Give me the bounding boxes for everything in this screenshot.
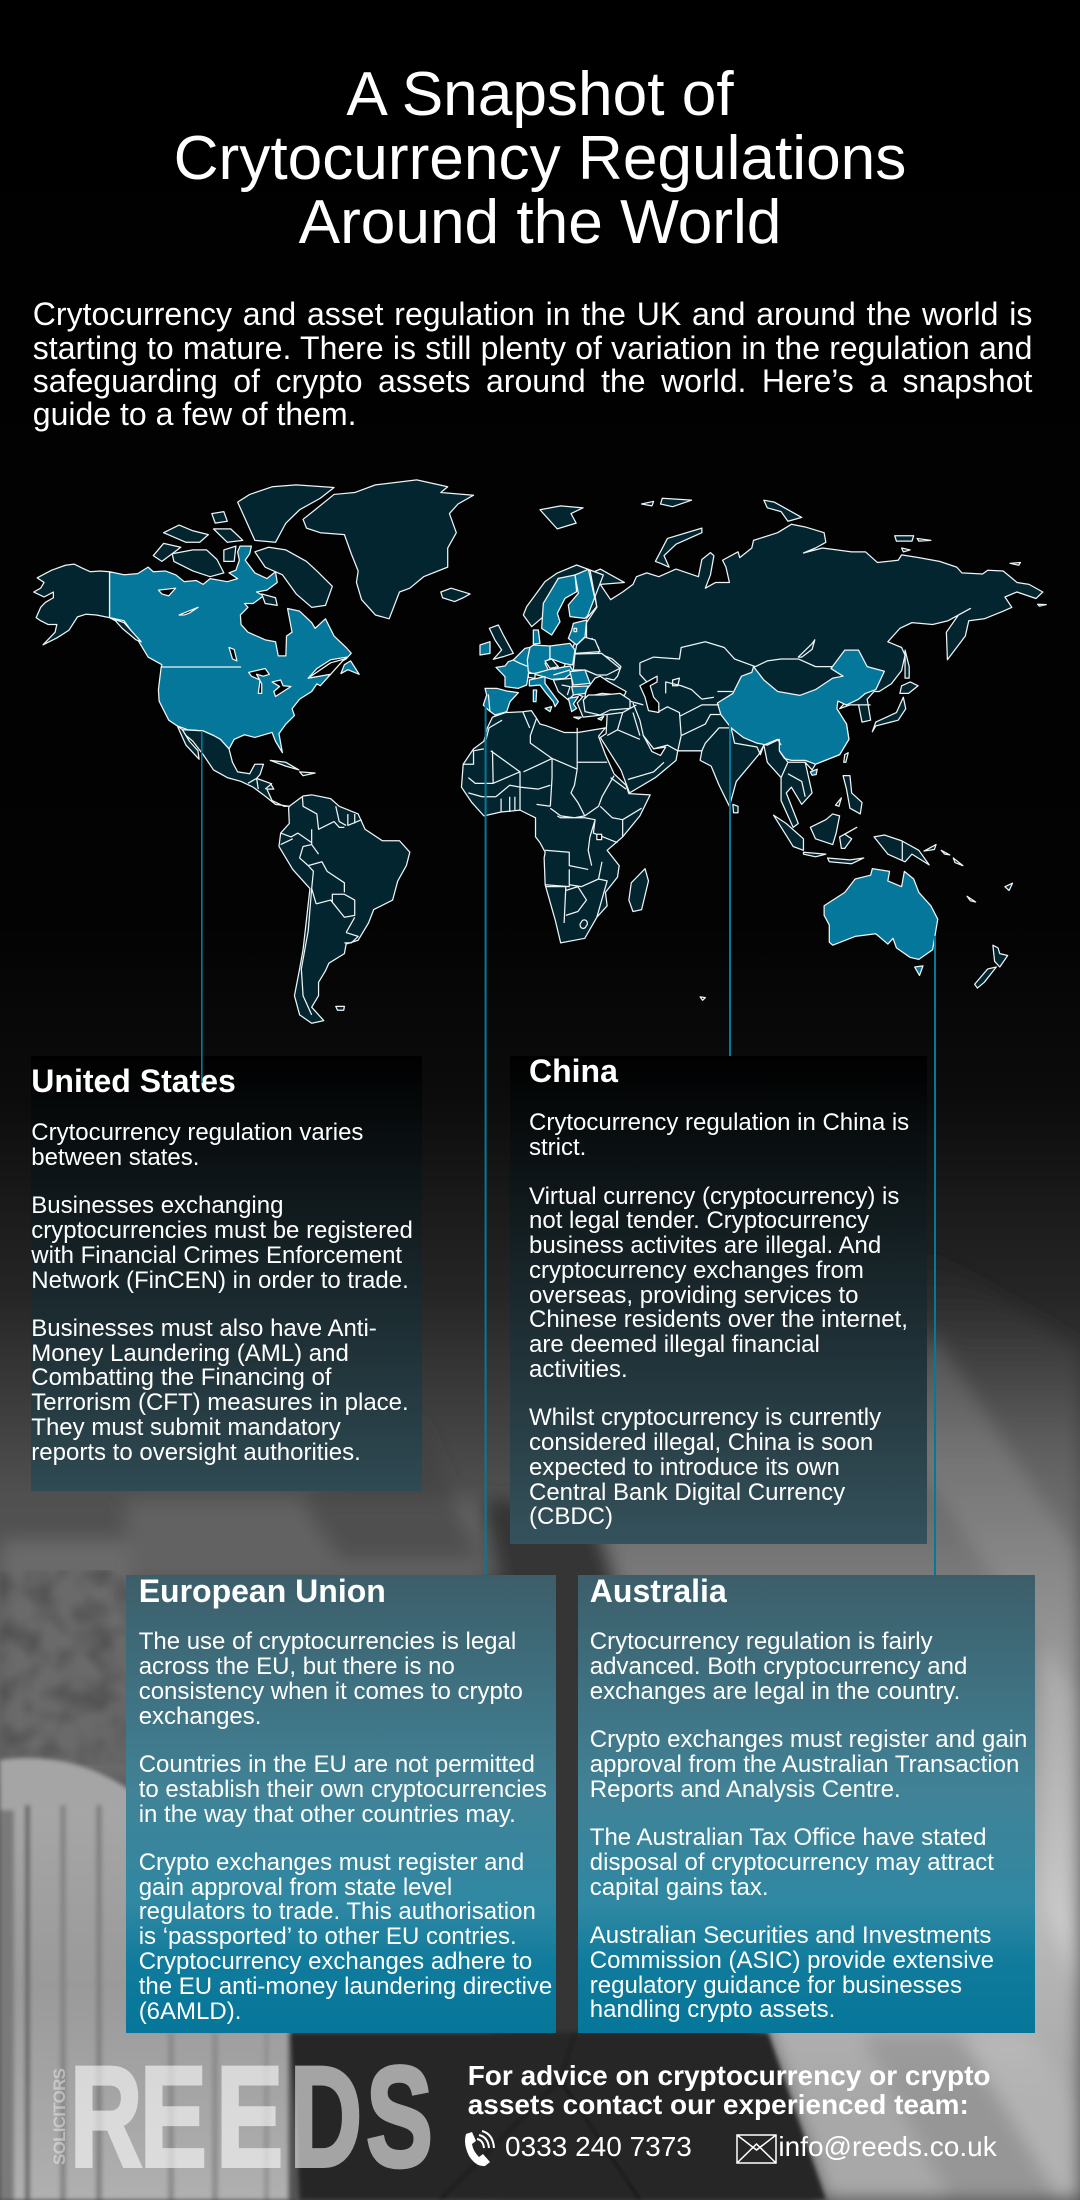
heading: United States: United States [31,1063,236,1099]
title [174,60,906,257]
text: United States details: reports to oversight authorities. [31,1439,361,1466]
text: United States details: Money Laundering (AML) and [31,1340,349,1367]
text: European Union details: gain approval from state level [139,1874,452,1901]
connector: European Union [485,704,487,1575]
text: Australia details: Crypto exchanges must register and gain [590,1726,1027,1753]
text: European Union details: to establish their own cryptocurrencies [139,1776,547,1803]
text: Australia details: capital gains tax. [590,1874,769,1901]
text: China details: business activites are illegal. And [529,1232,881,1259]
text: European Union details [139,1628,552,2024]
connector: Australia [934,936,936,1575]
panel: European Union [126,1575,556,2033]
intro text: safeguarding of crypto assets around the world. Here’s a snapshot [33,363,1032,399]
panel: China [510,1056,927,1544]
connector: United States [201,731,203,1083]
text: United States details: Businesses must also have Anti- [31,1315,377,1342]
text: Australia details: approval from the Australian Transaction [590,1751,1019,1778]
intro text: Crytocurrency and asset regulation in the UK and around the world is [33,296,1032,332]
email address: info@reeds.co.uk [778,2131,997,2162]
text: United States details: Businesses exchanging [31,1192,283,1219]
panel: United States [31,1056,422,1491]
text: European Union details: in the way that other countries may. [139,1801,516,1828]
text: China details: Virtual currency (cryptocurrency) is [529,1183,899,1210]
text: China details [529,1109,909,1530]
text: European Union details: consistency when it comes to crypto [139,1678,523,1705]
text: China details: (CBDC) [529,1503,613,1530]
panel: Australia [578,1575,1035,2033]
text: Australia details: Commission (ASIC) provide extensive [590,1947,994,1974]
text: United States details: They must submit mandatory [31,1414,341,1441]
title: Crytocurrency Regulations [174,124,906,193]
icon: envelope [736,2134,777,2164]
text: European Union details: is ‘passported’ to other EU contries. [139,1923,517,1950]
map: Americas [34,480,474,1023]
text: China details: strict. [529,1134,586,1161]
text: Australia details: The Australian Tax Office have stated [590,1824,986,1851]
text: United States details [31,1119,413,1466]
connector: China [729,716,731,1056]
text: Australia details: handling crypto assets. [590,1996,835,2023]
text: United States details: Combatting the Financing of [31,1364,331,1391]
text: European Union details: across the EU, but there is no [139,1653,455,1680]
intro text: starting to mature. There is still plenty of variation in the regulation and [33,330,1032,366]
call to action [468,2060,990,2120]
logo: REEDS Solicitors: REEDS [70,2037,433,2197]
text: United States details: with Financial Crimes Enforcement [31,1242,402,1269]
text: China details: overseas, providing services to [529,1282,858,1309]
text: Australia details: advanced. Both cryptocurrency and [590,1653,967,1680]
icon: telephone [465,2130,495,2166]
text: Australia details: disposal of cryptocurrency may attract [590,1849,994,1876]
logo: REEDS Solicitors: SOLICITORS [50,2068,69,2165]
text: European Union details: Crypto exchanges must register and [139,1849,524,1876]
text: Australia details: Australian Securities and Investments [590,1922,991,1949]
text: United States details: Network (FinCEN) in order to trade. [31,1267,409,1294]
text: China details: activities. [529,1356,628,1383]
intro text [33,296,1032,432]
text: Australia details: exchanges are legal in the country. [590,1678,960,1705]
map: Europe [480,565,630,715]
text: European Union details: Cryptocurrency exchanges adhere to [139,1948,532,1975]
heading: China: China [529,1053,618,1089]
text: China details: not legal tender. Cryptocurrency [529,1207,869,1234]
text: United States details: cryptocurrencies must be registered [31,1217,413,1244]
map: Africa, Asia and Oceania [461,498,1046,1000]
text: European Union details: The use of cryptocurrencies is legal [139,1628,516,1655]
text: Australia details: Crytocurrency regulation is fairly [590,1628,933,1655]
intro text: guide to a few of them. [33,396,357,432]
text: Australia details: regulatory guidance for businesses [590,1972,962,1999]
text: European Union details: regulators to trade. This authorisation [139,1898,536,1925]
text: China details: are deemed illegal financial [529,1331,820,1358]
call to action: For advice on cryptocurrency or crypto [468,2060,990,2091]
text: Australia details [590,1628,1027,2023]
text: United States details: Terrorism (CFT) measures in place. [31,1389,409,1416]
phone number: 0333 240 7373 [505,2131,692,2162]
text: China details: expected to introduce its own [529,1454,840,1481]
text: China details: Central Bank Digital Currency [529,1479,845,1506]
text: European Union details: the EU anti-money laundering directive [139,1973,552,2000]
text: China details: cryptocurrency exchanges from [529,1257,864,1284]
text: China details: Whilst cryptocurrency is currently [529,1404,881,1431]
call to action: assets contact our experienced team: [468,2089,969,2120]
heading: Australia: Australia [590,1573,727,1609]
text: European Union details: exchanges. [139,1703,261,1730]
text: United States details: between states. [31,1144,199,1171]
text: United States details: Crytocurrency regulation varies [31,1119,363,1146]
title: A Snapshot of [346,60,734,129]
text: China details: considered illegal, China is soon [529,1429,873,1456]
text: Australia details: Reports and Analysis Centre. [590,1776,901,1803]
heading: European Union: European Union [139,1573,386,1609]
title: Around the World [299,188,781,257]
text: China details: Chinese residents over the internet, [529,1306,908,1333]
text: European Union details: Countries in the EU are not permitted [139,1751,535,1778]
text: European Union details: (6AMLD). [139,1998,241,2024]
text: China details: Crytocurrency regulation in China is [529,1109,909,1136]
